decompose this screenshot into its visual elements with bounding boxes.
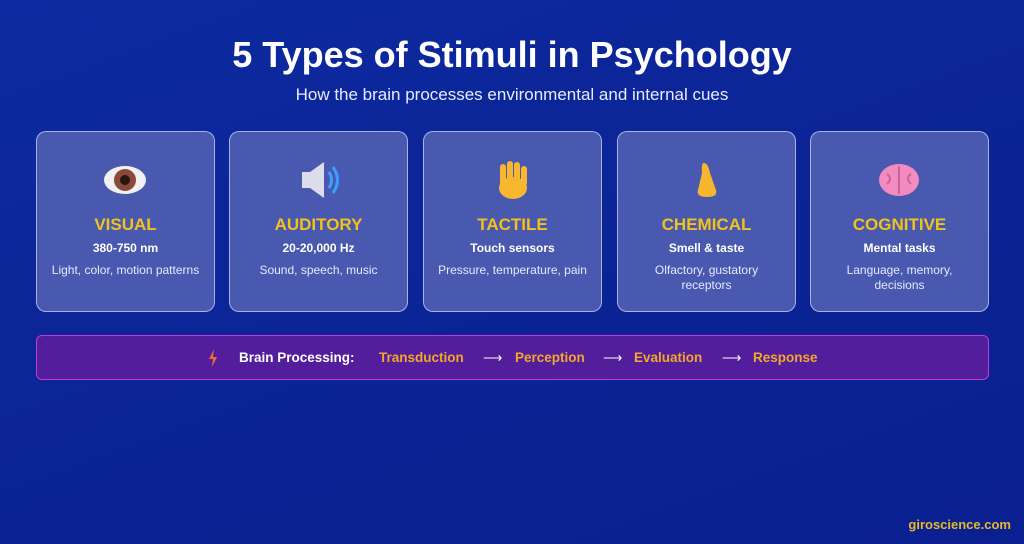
icon: hand <box>499 161 527 199</box>
card: auditory: Sound, speech, music <box>259 263 378 277</box>
icon: speaker <box>302 162 339 198</box>
process banner: ⟶ <box>483 350 502 365</box>
card: visual: Light, color, motion patterns <box>52 263 199 277</box>
card: chemical: Smell & taste <box>669 241 744 255</box>
icon: brain <box>879 164 919 196</box>
card: chemical: Olfactory, gustatory receptors <box>655 263 758 292</box>
card: chemical <box>617 131 796 312</box>
card: tactile: Touch sensors <box>470 241 555 255</box>
label: VISUAL <box>94 215 157 234</box>
card: cognitive: Language, memory, decisions <box>847 263 952 292</box>
icon: eye <box>104 166 146 194</box>
process banner: Brain Processing: <box>239 350 355 365</box>
process banner: Evaluation <box>634 350 702 365</box>
process banner: Response <box>753 350 818 365</box>
card: tactile: TACTILE <box>477 215 548 234</box>
card: chemical: CHEMICAL <box>662 215 751 234</box>
process banner: Transduction <box>379 350 464 365</box>
subtitle: How the brain processes environmental and internal cues <box>296 85 728 104</box>
card: visual <box>36 131 215 312</box>
icon: nose <box>698 163 716 197</box>
card: auditory: 20-20,000 Hz <box>282 241 355 255</box>
card: cognitive: COGNITIVE <box>853 215 946 234</box>
footer credit: giroscience.com <box>908 517 1011 532</box>
card: cognitive <box>810 131 989 312</box>
process banner: ⟶ <box>603 350 622 365</box>
card: auditory: AUDITORY <box>275 215 362 234</box>
process banner: Perception <box>515 350 585 365</box>
process banner: ⟶ <box>722 350 741 365</box>
card: auditory <box>229 131 408 312</box>
process banner <box>36 335 989 380</box>
card: tactile <box>423 131 602 312</box>
icon: lightning <box>209 349 217 367</box>
card: tactile: Pressure, temperature, pain <box>438 263 587 277</box>
card: cognitive: Mental tasks <box>863 241 936 255</box>
card: visual: 380-750 nm <box>93 241 158 255</box>
title: 5 Types of Stimuli in Psychology <box>232 34 792 75</box>
